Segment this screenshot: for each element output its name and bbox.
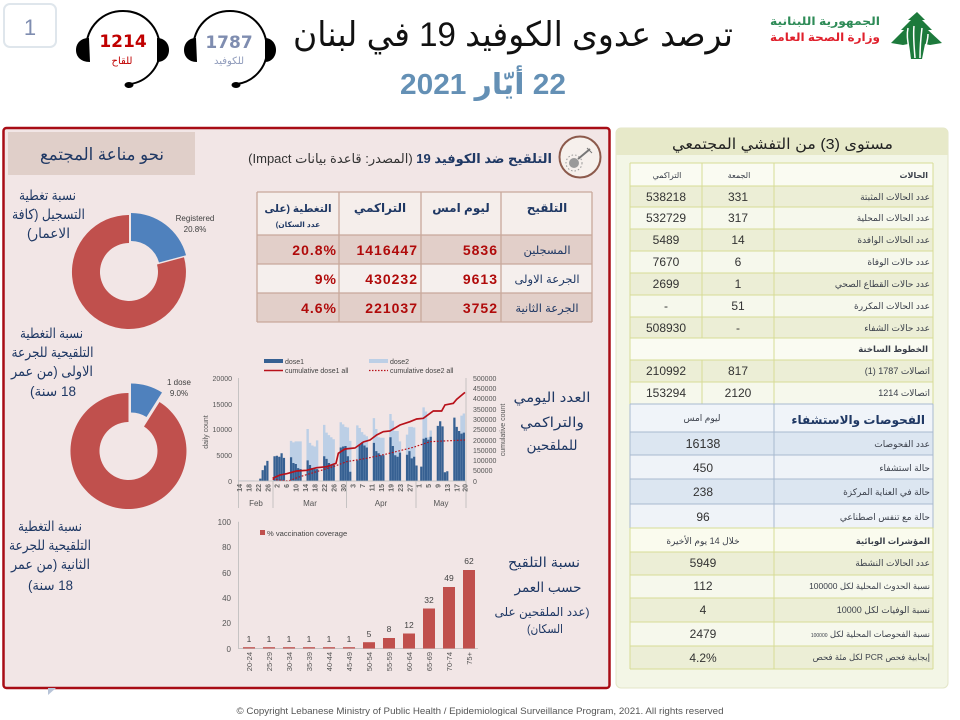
chart axes: 0 [473,479,477,486]
chart axes: 10 [294,484,300,492]
chart axes: 20000 [213,376,232,383]
chart: vaccination coverage by age: 40 [222,594,232,603]
table: cases: - [664,299,668,313]
text: registration coverage: الاعمار) [27,225,70,242]
chart: vaccination coverage by age: 75+ [465,651,474,665]
icon: covid hotline headset 1787: 1787 [205,33,253,53]
chart: vaccination coverage by age: 100 [218,518,232,527]
table: cases: 1 [735,277,742,291]
donut: first dose 9% [70,378,192,509]
table: cases: عدد حالات الوفاة [867,257,930,267]
table: vaccination summary: التراكمي [354,201,406,215]
table: cases: 5489 [653,233,680,247]
icon: covid hotline headset 1787: للكوفيد [214,56,244,67]
table: cases: 51 [731,299,745,313]
text: daily and cumulative vaccinated label: للملقحين [526,437,578,454]
table: tests and hospitalization [630,404,933,528]
chart axes: 10000 [213,427,232,434]
table: epidemiological indicators: خلال 14 يوم الأخيرة [666,535,740,546]
chart axes: 15000 [213,402,232,409]
table: cases: 317 [728,211,748,225]
text: coverage by age label: نسبة التلقيح [508,554,580,571]
chart: vaccination coverage by age: 60-64 [405,652,414,671]
table: cases: 7670 [653,255,680,269]
table: cases: - [736,321,740,335]
table: epidemiological indicators: نسبة الفحوصات المحلية لكل 100000 [811,629,930,639]
chart: vaccination coverage by age: 60 [222,569,232,578]
table: cases: عدد الحالات المحلية [857,213,930,223]
table: cases: 538218 [646,190,686,204]
table: vaccination summary: 430232 [365,271,418,287]
chart axes: 200000 [473,438,496,445]
table: cases: 6 [735,255,742,269]
chart: vaccination coverage by age: 20-24 [245,652,254,671]
table: cases: اتصالات 1214 [878,388,930,398]
chart legend: dose1 [285,359,304,366]
table: cases: الخطوط الساخنة [858,344,928,355]
table: vaccination summary: 1416447 [356,242,418,258]
text: first dose coverage: نسبة التغطية [20,325,83,341]
text: daily and cumulative vaccinated label: العدد اليومي [514,389,590,406]
table: tests and hospitalization: حالة في العناية المركزة [843,487,930,497]
table: vaccination summary: التلقيح [527,201,567,215]
table: tests and hospitalization: 16138 [686,437,720,451]
table: tests and hospitalization: الفحوصات والاستشفاء [791,413,925,428]
chart axes: 17 [454,484,462,492]
donut: registered 20.8% [72,213,214,329]
text: first dose coverage: التلقيحية للجرعة [12,344,94,361]
table: vaccination summary [257,192,592,322]
chart: vaccination coverage by age: 35-39 [305,652,314,671]
table: epidemiological indicators: إيجابية فحص PCR لكل مئة فحص [813,652,930,663]
chart axes: 14 [303,484,310,492]
text: coverage by age label: حسب العمر [514,579,582,596]
table: epidemiological indicators: نسبة الحدوث المحلية لكل 100000 [809,581,930,591]
chart axes: 500000 [473,376,496,383]
text: daily and cumulative vaccinated label: والتراكمي [520,414,584,431]
chart axes: 400000 [473,396,496,403]
text: coverage by age label [494,554,590,636]
line: cumulative dose1 and dose2 [273,392,465,481]
heading: vaccination against covid: التلقيح ضد الكوفيد 19 (المصدر: قاعدة بيانات Impact) [248,151,552,167]
chart axes [203,376,507,508]
table: epidemiological indicators: نسبة الوفيات لكل 10000 [837,605,930,615]
table: cases: التراكمي [653,171,681,180]
page number box [4,4,56,47]
donut: first dose 9%: 1 dose [167,378,192,387]
donut: registered 20.8%: 20.8% [184,225,206,234]
table: vaccination summary: 9% [315,271,337,287]
icon: syringe and virus [560,136,600,178]
table: cases: عدد الحالات الوافدة [857,235,930,245]
bars: dose1 [260,418,464,481]
chart: vaccination coverage by age: 1 [267,634,272,644]
table: vaccination summary: 5836 [463,242,498,258]
table: cases: عدد حالات القطاع الصحي [835,279,930,289]
chart: vaccination coverage by age: 12 [404,620,414,630]
chart axes: 11 [370,484,376,491]
chart axes: 22 [256,484,263,492]
table: cases: 331 [728,190,748,204]
chart axes: 13 [445,484,452,492]
chart: vaccination coverage by age: 20 [222,619,232,628]
table: cases: عدد الحالات المكررة [854,301,930,311]
text: daily and cumulative vaccinated label [514,389,590,454]
chart: vaccination coverage by age: 0 [227,645,232,654]
chart legend: % vaccination coverage [267,529,347,538]
heading: towards community immunity [8,132,195,175]
table: tests and hospitalization: ليوم امس [684,413,720,423]
chart: vaccination coverage by age: 50-54 [365,652,374,671]
chart axes: 3 [350,484,358,488]
table: vaccination summary: 4.6% [301,300,337,316]
heading: towards community immunity: نحو مناعة المجتمع [40,145,164,165]
text: registration coverage: نسبة تغطية [19,187,76,203]
table: vaccination summary: 221037 [365,300,418,316]
chart axes: 30 [341,484,348,492]
table: cases: 210992 [646,364,686,378]
chart legend: dose2 [390,359,409,366]
chart: vaccination coverage by age: 25-29 [265,652,274,671]
chart axes: 100000 [473,458,496,465]
chart: vaccination coverage by age: 45-49 [345,652,354,671]
chart axes: 7 [360,484,367,488]
icon: covid hotline headset 1787 [184,11,276,88]
table: tests and hospitalization: حالة استشفاء [879,463,930,473]
text: first dose coverage: الاولى (من عمر [10,363,93,380]
ministry name [770,16,880,45]
table: epidemiological indicators: 4 [700,603,707,617]
chart axes: 26 [332,484,338,492]
chart: vaccination coverage by age: 70-74 [445,652,454,671]
chart legend: cumulative dose1 all [285,368,349,375]
chart: vaccination coverage by age: 40-44 [325,652,334,671]
chart axes: 0 [228,479,232,486]
chart: vaccination coverage by age: 1 [347,634,352,644]
heading: transmission level [616,128,948,155]
table: tests and hospitalization: 238 [693,485,713,499]
page number box: 1 [24,15,36,40]
chart axes: daily count [203,415,210,449]
chart: vaccination coverage by age: 1 [307,634,312,644]
chart axes: Mar [303,499,317,508]
chart: vaccination coverage by age: 49 [444,573,454,583]
chart: vaccination coverage by age: 80 [222,543,232,552]
chart axes: Feb [249,499,263,508]
table: tests and hospitalization: عدد الفحوصات [874,439,930,449]
chart: vaccination coverage by age [218,518,478,671]
chart axes: 20 [462,484,470,492]
table: cases: الجمعة [728,171,750,180]
chart axes: 150000 [473,448,496,455]
chart axes: 2 [274,484,282,488]
chart axes: 15 [379,484,386,492]
text: coverage by age label: (عدد الملقحين على [494,605,590,620]
chart axes: 5 [426,484,433,488]
decorative corner arrow [48,688,56,695]
chart: vaccination coverage by age: 55-59 [385,652,394,671]
table: cases: 532729 [646,211,686,225]
table: vaccination summary: المسجلين [523,245,571,258]
chart legend [264,359,454,375]
chart: vaccination coverage by age: 1 [287,634,292,644]
table: cases: عدد حالات الشفاء [864,323,930,333]
table: cases: 508930 [646,321,686,335]
chart: daily and cumulative vaccinated [203,359,507,508]
table: tests and hospitalization: 96 [696,510,710,524]
table: epidemiological indicators: عدد الحالات النشطة [855,558,930,568]
table: epidemiological indicators: المؤشرات الوبائية [856,536,930,547]
chart axes: 19 [388,484,396,492]
icon: cedar logo [891,12,942,59]
ministry name: الجمهورية اللبنانية [770,16,880,29]
text: first dose coverage: 18 سنة) [30,383,76,399]
icon: vaccine hotline headset 1214: للقاح [112,56,132,67]
heading: transmission level: مستوى (3) من التفشي المجتمعي [672,136,893,154]
icon: vaccine hotline headset 1214: 1214 [99,32,147,52]
table: vaccination summary: 9613 [463,271,498,287]
text: second dose coverage [9,518,91,593]
chart axes: 18 [246,484,254,492]
chart axes: 18 [312,484,320,492]
table: vaccination summary: 20.8% [292,242,337,258]
text: second dose coverage: نسبة التغطية [18,518,82,534]
panel: community transmission [616,128,948,688]
chart axes: May [433,499,449,508]
chart axes: 350000 [473,407,496,414]
table: epidemiological indicators: 112 [693,579,713,593]
chart axes: 26 [266,484,272,492]
footer copyright: © Copyright Lebanese Ministry of Public Health / Epidemiological Surveillance Program, 2021. All rights reserved [236,706,724,716]
table: vaccination summary: عدد السكان) [276,220,320,229]
text: second dose coverage: الثانية (من عمر [10,556,90,573]
table: vaccination summary: الجرعة الاولى [514,274,580,287]
chart: vaccination coverage by age: 5 [367,629,372,639]
table: cases: اتصالات 1787 (1) [865,366,930,376]
chart axes: 5000 [216,453,232,460]
chart axes: 450000 [473,386,496,393]
chart axes: cumulative count [500,404,507,456]
bars: dose2 [239,407,464,481]
donut: registered 20.8%: Registered [176,214,214,223]
table: vaccination summary: الجرعة الثانية [515,303,579,316]
chart axes: 300000 [473,417,496,424]
chart axes: 9 [436,484,442,488]
ministry name: وزارة الصحة العامة [770,32,880,45]
date subtitle: 22 أيّار 2021 [400,65,566,101]
chart: vaccination coverage by age: 62 [464,556,474,566]
chart axes: 27 [408,484,414,492]
chart: vaccination coverage by age: 30-34 [285,652,294,671]
table: tests and hospitalization: حالة مع تنفس اصطناعي [840,512,930,522]
chart: vaccination coverage by age: 1 [327,634,332,644]
chart axes: 14 [237,484,244,492]
table: cases: 817 [728,364,748,378]
text: second dose coverage: 18 سنة) [28,577,73,593]
table: cases: عدد الحالات المثبتة [860,192,930,202]
panel: vaccination [4,128,610,688]
text: first dose coverage [10,325,93,399]
bars: coverage [243,570,475,648]
chart: vaccination coverage by age: 32 [424,595,434,605]
table: cases: 14 [731,233,745,247]
table: vaccination summary: التغطية (على [264,203,332,215]
table: vaccination summary: 3752 [463,300,498,316]
chart: vaccination coverage by age: 65-69 [425,652,434,671]
chart axes: 250000 [473,427,496,434]
donut: first dose 9%: 9.0% [170,389,188,398]
chart: vaccination coverage by age: 8 [387,624,392,634]
chart axes: 1 [416,484,424,488]
table: tests and hospitalization: 450 [693,461,713,475]
chart axes: 6 [284,484,291,488]
chart axes: 22 [322,484,329,492]
table: cases: 153294 [646,386,686,400]
title: ترصد عدوى الكوفيد 19 في لبنان [293,16,733,55]
chart legend: cumulative dose2 all [390,368,454,375]
table: cases [630,163,933,404]
table: epidemiological indicators: 2479 [690,627,717,641]
table: epidemiological indicators [630,528,933,669]
table: cases: 2120 [725,386,752,400]
chart axes: 50000 [473,468,493,475]
text: registration coverage: التسجيل (كافة [12,206,85,222]
table: vaccination summary: ليوم امس [432,201,490,216]
table: cases: الحالات [899,171,928,180]
chart: vaccination coverage by age: 1 [247,634,252,644]
table: epidemiological indicators: 4.2% [689,651,717,665]
icon: vaccine hotline headset 1214 [76,11,169,88]
text: second dose coverage: التلقيحية للجرعة [9,537,91,554]
text: coverage by age label: السكان) [527,622,563,636]
chart axes: 23 [398,484,405,492]
table: epidemiological indicators: 5949 [690,556,717,570]
table: cases: 2699 [653,277,680,291]
text: registration coverage [12,187,85,242]
chart axes: Apr [375,499,388,508]
